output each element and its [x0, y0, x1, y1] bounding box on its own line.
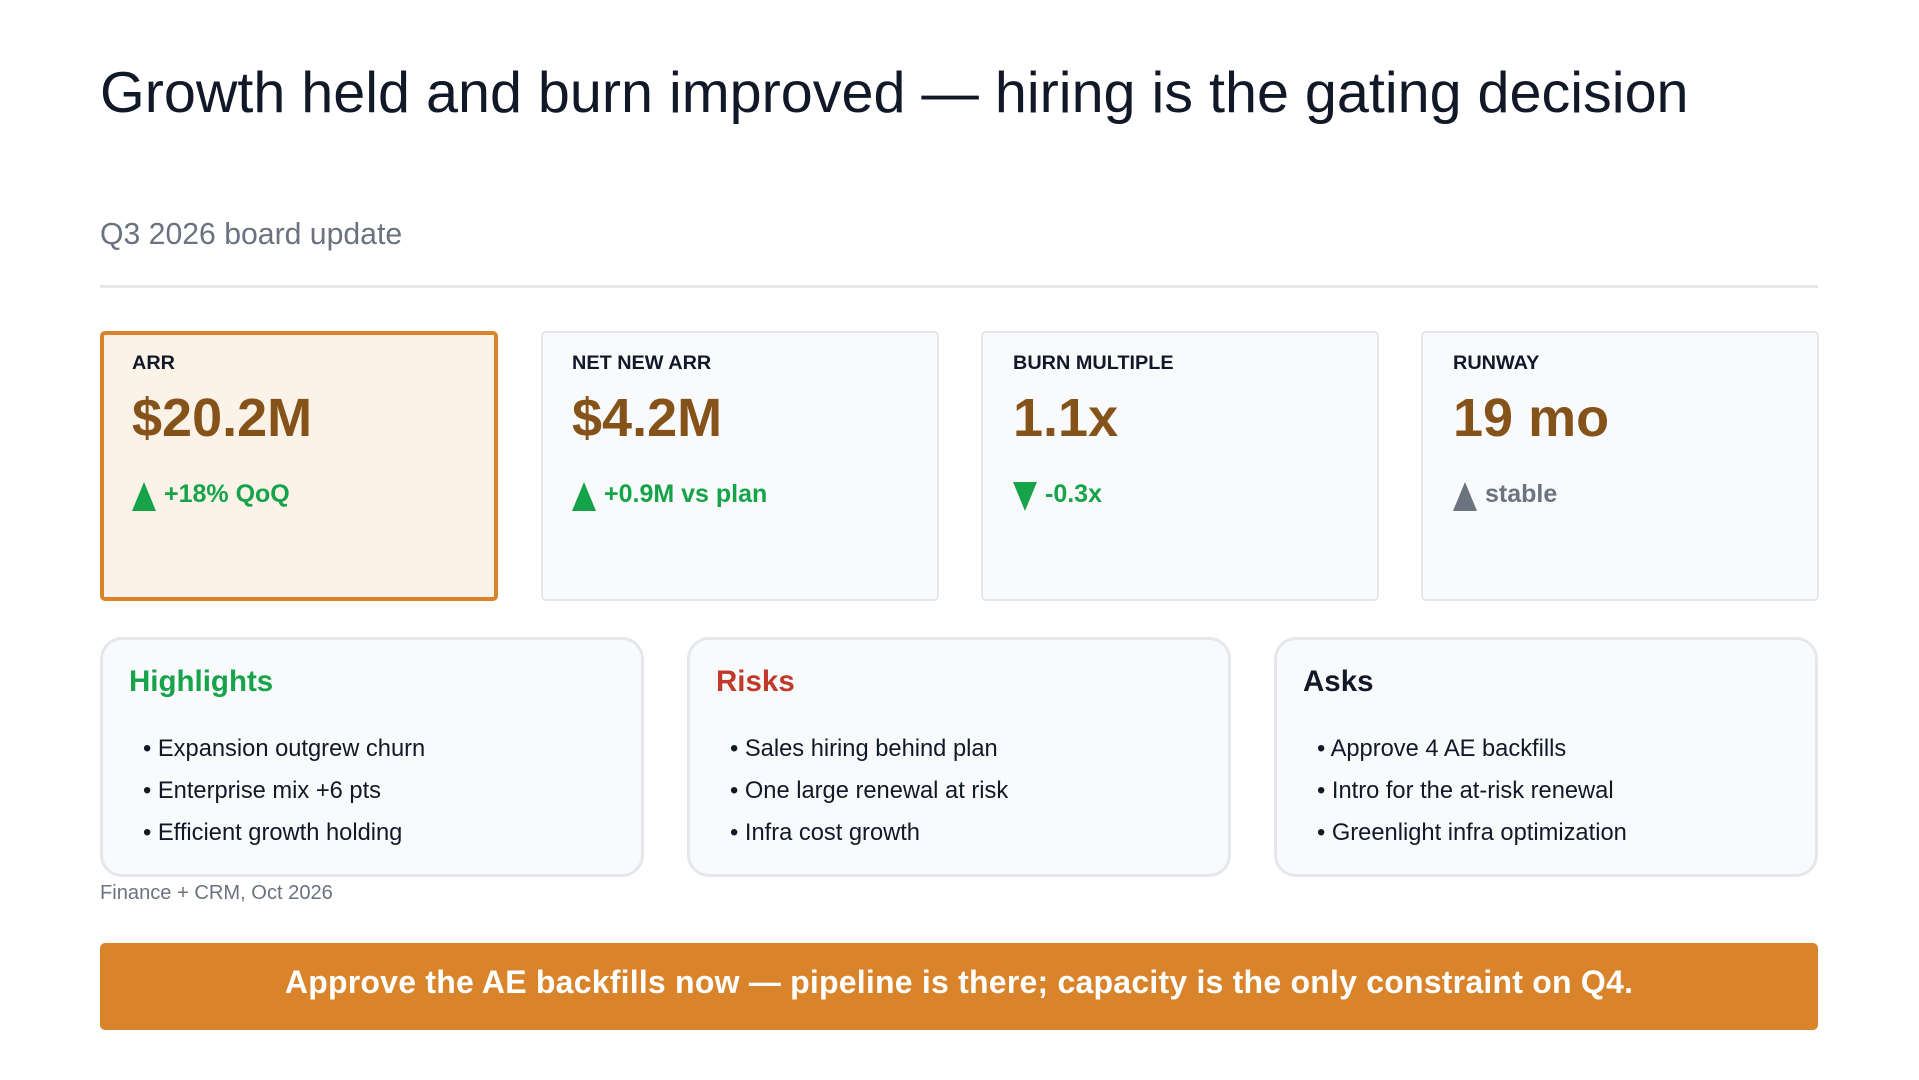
heading: highlights: Highlights	[129, 665, 273, 698]
bullet list: risks	[730, 736, 1008, 846]
delta: ARR: +18% QoQ	[164, 480, 290, 508]
value: runway: 19 mo	[1453, 388, 1609, 448]
icon: down triangle	[1013, 482, 1037, 511]
text: • Sales hiring behind plan	[730, 736, 998, 762]
text: • Approve 4 AE backfills	[1317, 736, 1566, 762]
icon: up triangle	[572, 482, 596, 511]
text: • Expansion outgrew churn	[143, 736, 425, 762]
value: burn multiple: 1.1x	[1013, 388, 1118, 448]
panel: highlights	[100, 637, 644, 877]
label: runway: RUNWAY	[1453, 352, 1539, 374]
heading: risks: Risks	[716, 665, 795, 698]
panel: burn multiple KPI card	[981, 331, 1379, 601]
delta: runway: stable	[1485, 480, 1557, 508]
panel: asks	[1274, 637, 1818, 877]
icon: neutral triangle	[1453, 482, 1477, 511]
title: Growth held and burn improved — hiring is the gating decision	[100, 61, 1689, 125]
text: • Enterprise mix +6 pts	[143, 778, 381, 804]
subtitle: Q3 2026 board update	[100, 218, 402, 251]
delta: burn multiple: -0.3x	[1045, 480, 1102, 508]
panel: risks	[687, 637, 1231, 877]
value: net new ARR: $4.2M	[572, 388, 722, 448]
text: • Efficient growth holding	[143, 820, 402, 846]
panel: net new ARR KPI card	[541, 331, 939, 601]
label: burn multiple: BURN MULTIPLE	[1013, 352, 1174, 374]
heading: asks: Asks	[1303, 665, 1374, 698]
label: ARR: ARR	[132, 352, 175, 374]
panel: ARR KPI card	[100, 331, 498, 601]
label: net new ARR: NET NEW ARR	[572, 352, 711, 374]
source note: Finance + CRM, Oct 2026	[100, 882, 333, 904]
delta: net new ARR: +0.9M vs plan	[604, 480, 767, 508]
text: • Intro for the at-risk renewal	[1317, 778, 1614, 804]
value: ARR: $20.2M	[132, 388, 312, 448]
callout banner	[100, 943, 1818, 1030]
text: • One large renewal at risk	[730, 778, 1008, 804]
bullet list: highlights	[143, 736, 425, 846]
icon: up triangle	[132, 482, 156, 511]
callout banner: Approve the AE backfills now — pipeline is there; capacity is the only constraint on Q4.	[285, 964, 1633, 1000]
bullet list: asks	[1317, 736, 1627, 846]
panel: runway KPI card	[1421, 331, 1819, 601]
text: • Greenlight infra optimization	[1317, 820, 1627, 846]
text: • Infra cost growth	[730, 820, 920, 846]
